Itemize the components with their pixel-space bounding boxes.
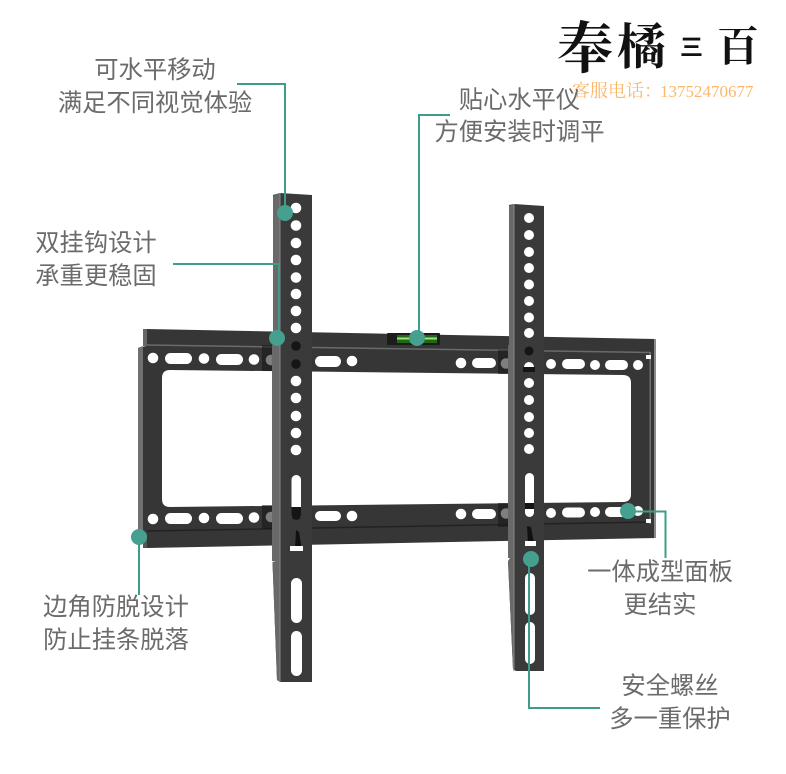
logo [557,19,759,81]
callout: one-piece panel: 一体成型面板 [587,559,733,586]
callout: corner protection: 边角防脱设计 [43,594,189,621]
callout: level [409,87,605,346]
callout: horizontal movement: 可水平移动 [94,57,216,84]
callout: safety screw: 多一重保护 [609,706,731,733]
callout: level: 方便安装时调平 [434,119,605,146]
logo: 奉 [557,19,613,81]
callout: safety screw [523,551,731,733]
callout: double hook [35,230,285,346]
callout: corner protection [43,529,189,654]
callout: horizontal movement [58,57,293,221]
window opening [162,370,631,507]
left vertical strip [262,193,312,682]
horizontal plate [138,329,656,548]
callout: level: 贴心水平仪 [459,87,580,114]
callout: safety screw: 安全螺丝 [621,673,719,700]
logo: 三 [680,34,703,60]
logo: 橘 [617,20,666,75]
callout: corner protection: 防止挂条脱落 [43,627,189,654]
lower holes [148,506,643,524]
wall mount bracket [138,193,656,682]
upper holes [148,353,643,370]
callout: double hook: 承重更稳固 [35,263,157,290]
phone number: 客服电话： [572,81,662,101]
phone number [572,81,754,101]
callout: double hook: 双挂钩设计 [35,230,157,257]
callout: one-piece panel: 更结实 [624,592,696,619]
callout: one-piece panel [587,503,733,619]
logo: 百 [717,25,759,71]
callout: horizontal movement: 满足不同视觉体验 [58,90,252,117]
right vertical strip [498,204,544,671]
level bubble [387,333,440,345]
phone number: 13752470677 [660,82,754,101]
